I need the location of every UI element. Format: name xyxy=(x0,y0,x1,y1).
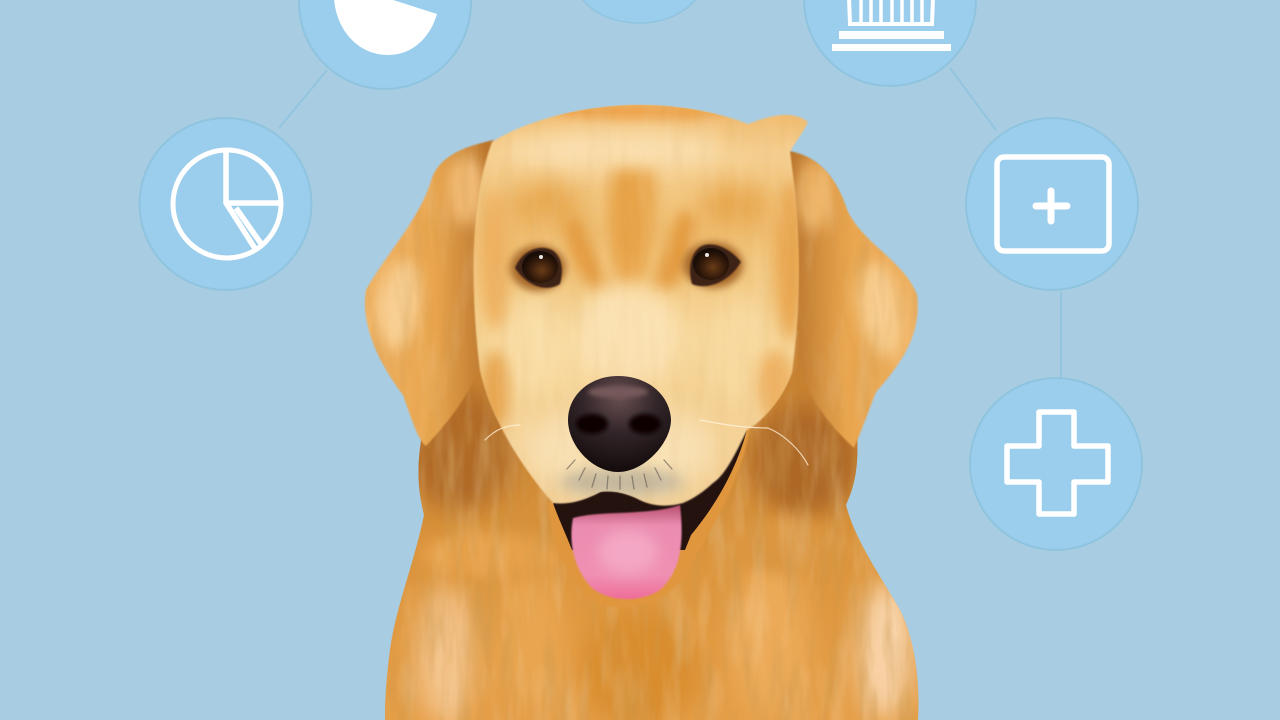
connector lines between icons xyxy=(279,68,1061,378)
dog lower jaw and lip xyxy=(548,428,750,607)
icon: partial top circle xyxy=(580,0,698,23)
dog ears xyxy=(360,135,930,455)
icon: institution building xyxy=(804,0,976,86)
icon: medical card with plus xyxy=(966,118,1138,290)
illustration: dog surrounded by health icons xyxy=(138,0,1143,720)
dog muzzle fur and whiskers xyxy=(485,420,808,489)
icon: medical cross xyxy=(970,378,1142,550)
dog mouth xyxy=(553,430,747,550)
icon: outlined pie chart xyxy=(140,118,312,290)
dog nose xyxy=(568,376,671,472)
dog xyxy=(360,103,930,720)
icon: solid pie chart xyxy=(299,0,471,89)
dog eyes xyxy=(510,242,743,291)
dog head xyxy=(470,103,810,506)
dog tongue xyxy=(571,505,682,599)
dog body and chest xyxy=(385,302,918,720)
